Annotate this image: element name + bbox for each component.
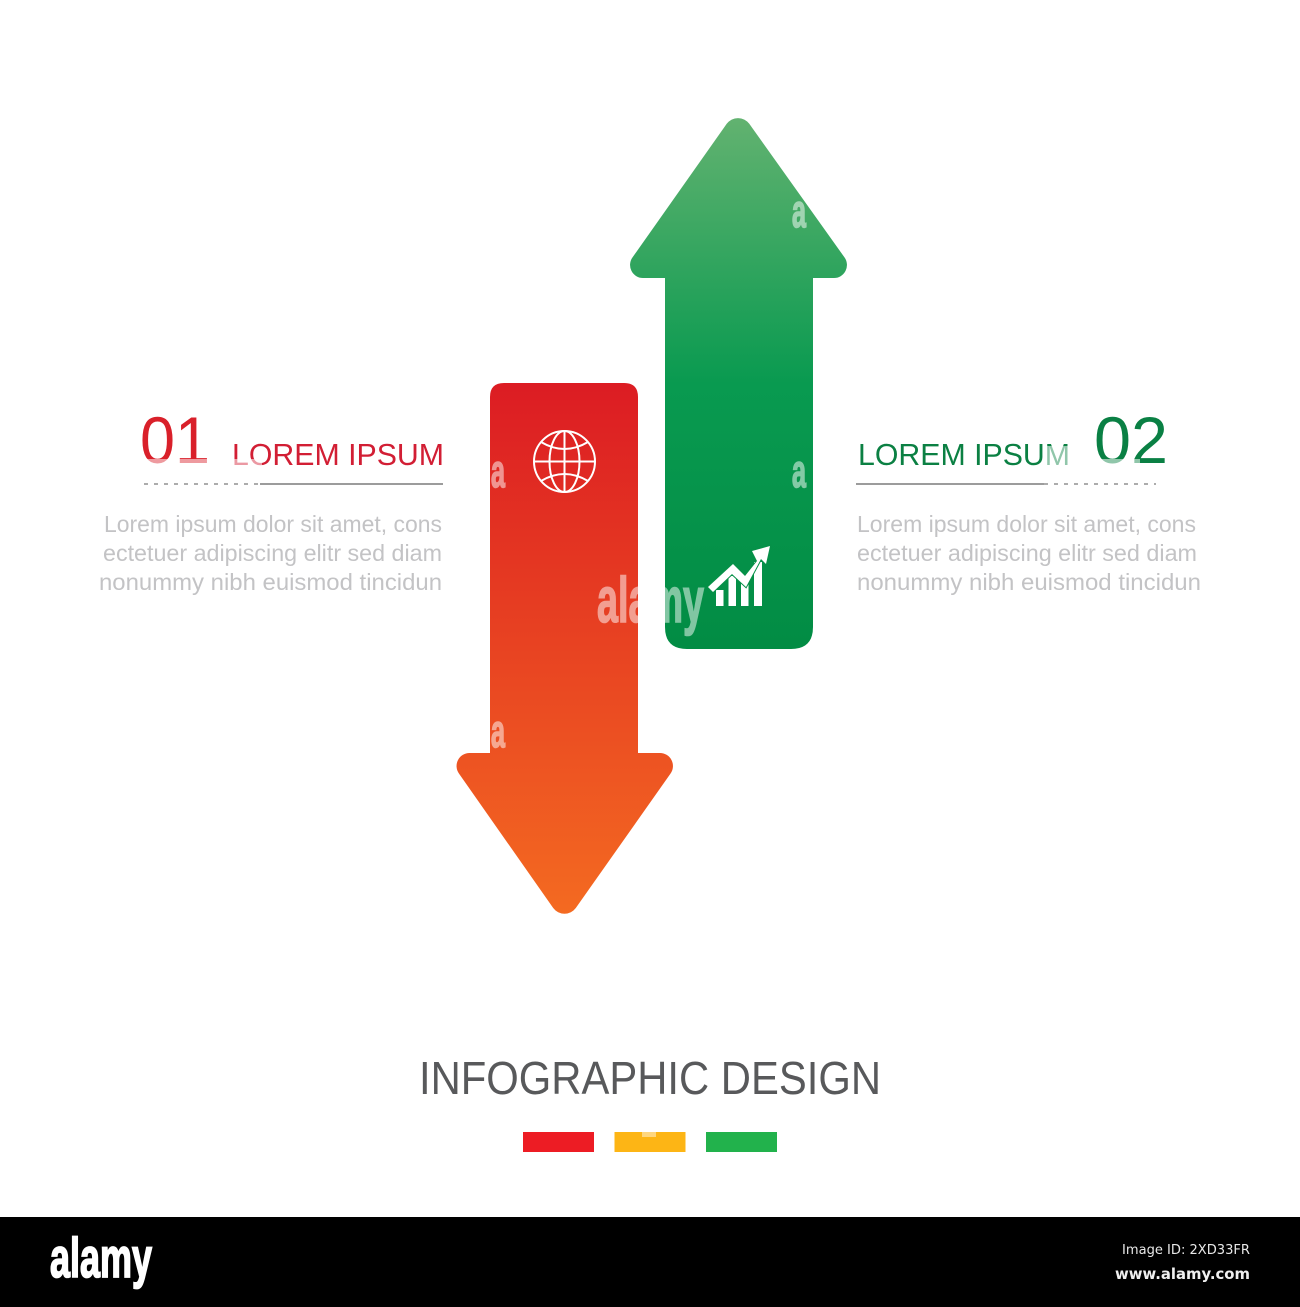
body text left: ectetuer adipiscing elitr sed diam — [103, 540, 442, 566]
watermark mask over heading numbers — [142, 446, 1140, 466]
watermark fragments: a — [792, 445, 806, 497]
body text right — [857, 511, 1201, 595]
watermark fragments: alamy — [597, 564, 704, 636]
body text right: Lorem ipsum dolor sit amet, cons — [857, 511, 1196, 537]
heading: lorem ipsum right: LOREM IPSUM — [858, 438, 1070, 472]
watermark fragments — [491, 185, 806, 757]
body text left — [99, 511, 442, 595]
watermark fragments: a — [792, 185, 806, 237]
body text right: nonummy nibh euismod tincidun — [857, 569, 1201, 595]
heading number 01: 01 — [140, 403, 210, 477]
heading: lorem ipsum left: LOREM IPSUM — [232, 438, 444, 472]
title: INFOGRAPHIC DESIGN — [419, 1052, 881, 1104]
footer logo: alamy — [50, 1226, 152, 1289]
body text left: Lorem ipsum dolor sit amet, cons — [104, 511, 442, 537]
divider right — [856, 483, 1156, 485]
body text left: nonummy nibh euismod tincidun — [99, 569, 442, 595]
colour legend bars — [523, 1132, 777, 1152]
footer image id: Image ID: 2XD33FR — [1122, 1242, 1250, 1258]
footer url: www.alamy.com — [1115, 1265, 1250, 1283]
heading number 02: 02 — [1094, 403, 1168, 477]
icon: globe — [534, 431, 595, 492]
body text right: ectetuer adipiscing elitr sed diam — [857, 540, 1197, 566]
arrow: green up — [630, 118, 847, 649]
watermark fragments: a — [491, 705, 505, 757]
icon: rising chart — [708, 546, 770, 606]
arrow: red down — [457, 383, 673, 914]
divider left — [144, 483, 443, 485]
watermark fragments: a — [491, 445, 505, 497]
footer bar — [0, 1217, 1300, 1307]
